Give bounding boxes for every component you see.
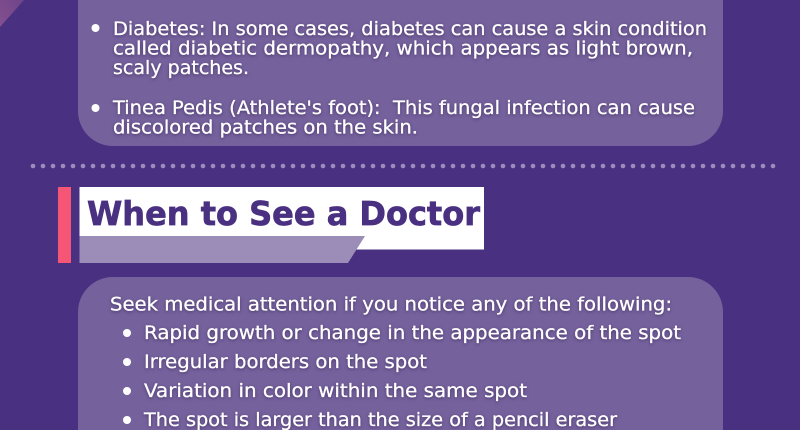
heading text: When to See a Doctor	[87, 194, 481, 233]
bullet: rapid growth: Rapid growth or change in the appearance of the spot	[144, 322, 681, 344]
dotted divider	[31, 164, 775, 168]
bullet: tinea pedis: discolored patches on the skin.	[113, 116, 418, 138]
panel: skin conditions list	[78, 0, 723, 146]
bullet: irregular borders: Irregular borders on the spot	[144, 351, 427, 373]
bullet: diabetes: Diabetes: In some cases, diabetes can cause a skin condition	[113, 18, 707, 40]
panel: warning signs	[78, 277, 723, 430]
heading lavender ribbon	[80, 236, 365, 263]
heading: When to See a Doctor	[58, 187, 484, 263]
bullet: diabetes: scaly patches.	[113, 57, 249, 79]
bullet: diabetes	[92, 18, 707, 79]
bullet: tinea pedis	[92, 97, 695, 138]
heading white box	[80, 187, 484, 250]
bullet: tinea pedis: Tinea Pedis (Athlete's foot): This fungal infection can cause	[112, 97, 695, 119]
decorative corner shape	[0, 0, 24, 27]
bullet: diabetes: called diabetic dermopathy, which appears as light brown,	[113, 38, 693, 60]
heading accent bar	[58, 187, 71, 263]
intro text: Seek medical attention if you notice any of the following:	[110, 294, 672, 316]
bullet: color variation: Variation in color within the same spot	[144, 380, 527, 402]
